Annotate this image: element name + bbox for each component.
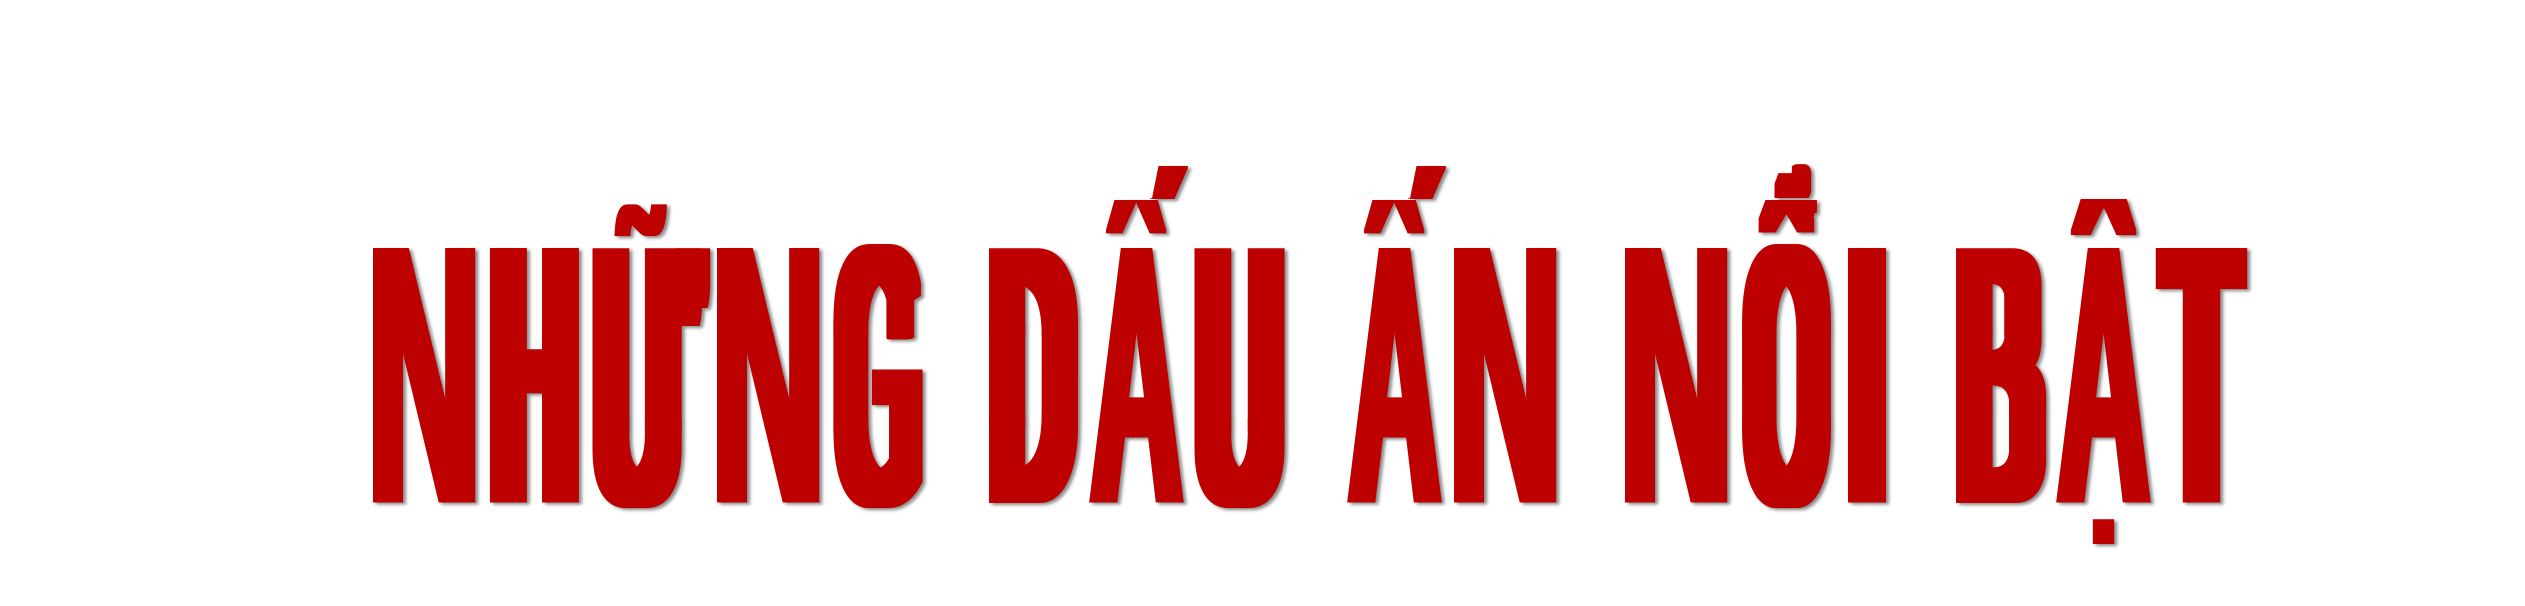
word: ẤN [1349, 167, 1562, 582]
word: NHỮNG [368, 168, 919, 582]
word: NỔI: N [1620, 168, 1733, 582]
word: NỔI [1620, 168, 1884, 582]
word: NỔI: I [1850, 168, 1884, 582]
word: NHỮNG: N [368, 168, 481, 582]
word: DẤU: U [1198, 300, 1282, 547]
title [368, 167, 2239, 582]
word: NHỮNG: N [712, 168, 825, 582]
word: NHỮNG: H [492, 168, 577, 582]
word: ẤN: N [1448, 168, 1562, 582]
word: NỔI: Ổ [1748, 299, 1825, 547]
word: BẬT: T [2164, 168, 2239, 582]
word: ẤN: Ấ [1349, 167, 1440, 582]
word: DẤU [992, 167, 1282, 582]
word: NHỮNG: Ữ [596, 300, 694, 547]
word: BẬT [1958, 167, 2239, 582]
word: DẤU: D [992, 297, 1073, 544]
word: NHỮNG: G [839, 300, 919, 547]
word: BẬT: Ậ [2058, 167, 2149, 582]
word: DẤU: Ấ [1091, 167, 1182, 582]
word: BẬT: B [1958, 297, 2041, 544]
